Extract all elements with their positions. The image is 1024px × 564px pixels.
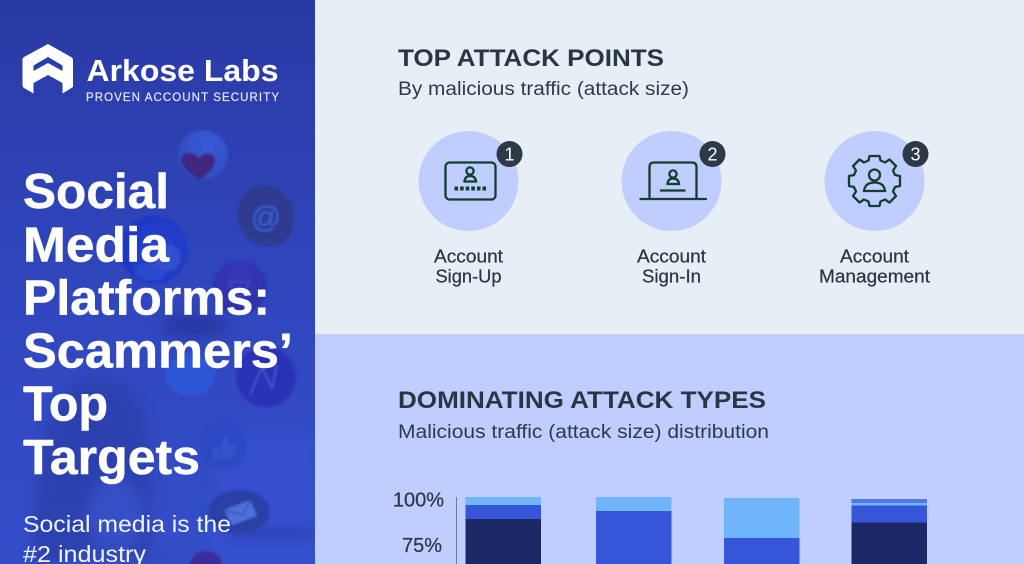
subheading: distribution: Malicious traffic (attack size) distribution <box>398 422 769 443</box>
label: account sign-in: Sign-In <box>642 266 701 286</box>
icon: thumbs up bubble <box>199 422 247 470</box>
panel: top attack points <box>315 0 1024 334</box>
title: Media <box>23 218 170 272</box>
label: account management: Management <box>819 266 930 286</box>
logo wordmark: Arkose Labs <box>86 53 278 88</box>
icon: network bubble <box>236 347 296 407</box>
icon: gear with user <box>849 156 900 206</box>
icon: chat bubble <box>120 216 188 284</box>
title: Scammers’ <box>23 324 293 378</box>
badge: 2: 2 <box>707 144 718 164</box>
bar 4 <box>852 499 927 564</box>
label: account sign-up: Sign-Up <box>436 266 502 286</box>
badge: 1: 1 <box>504 144 515 164</box>
panel: left hero <box>0 0 315 564</box>
attack point 1: account sign-up <box>418 131 522 286</box>
icon: at sign bubble: @ <box>251 201 281 234</box>
heading: dominating attack types: DOMINATING ATTACK TYPES <box>398 387 766 414</box>
bar 2 <box>596 497 672 564</box>
icon: bottom bubble <box>189 551 223 564</box>
intro text: Social media is the <box>23 511 231 537</box>
label: account sign-in: Account <box>637 246 706 266</box>
photo: blurred woman and desk background <box>33 314 315 564</box>
icon: laptop with user <box>640 162 706 199</box>
icon: purple mail bubble <box>213 260 267 314</box>
heading: top attack points: TOP ATTACK POINTS <box>398 45 664 72</box>
title: Platforms: <box>23 272 270 326</box>
y axis line <box>456 497 457 564</box>
bar 1 <box>466 497 541 564</box>
stacked bar chart <box>393 490 927 564</box>
badge: 2 <box>700 141 726 167</box>
label: account management: Account <box>840 246 909 266</box>
subheading: malicious traffic: By malicious traffic (attack size) <box>398 79 689 100</box>
icon: envelope bubble <box>208 490 270 534</box>
label: account sign-up: Account <box>434 246 503 266</box>
title: Social <box>23 165 169 219</box>
icon: at sign bubble <box>228 176 304 256</box>
bar 3 <box>724 498 800 564</box>
y axis labels: 100% <box>393 490 444 512</box>
title <box>23 165 293 485</box>
logo tagline: PROVEN ACCOUNT SECURITY <box>86 92 279 104</box>
logo: Arkose Labs <box>22 44 279 104</box>
badge: 3 <box>902 141 928 167</box>
intro text <box>23 511 231 564</box>
attack point 3: account management <box>819 131 930 286</box>
attack point 2: account sign-in <box>622 131 726 286</box>
label: account sign-in <box>637 246 706 286</box>
y axis labels: 75% <box>402 535 442 557</box>
panel: dominating attack types <box>315 334 1024 564</box>
title: Targets <box>23 431 200 485</box>
label: account management <box>819 246 930 286</box>
icon: logo mark <box>22 44 73 94</box>
badge: 1 <box>496 141 522 167</box>
y axis labels <box>393 490 444 557</box>
icon: heart bubble <box>178 130 228 180</box>
badge: 3: 3 <box>910 144 921 164</box>
title: Top <box>23 378 108 432</box>
label: account sign-up <box>434 246 503 286</box>
icon: sign-up card <box>446 162 496 200</box>
icon: blue like bubble <box>165 354 215 396</box>
